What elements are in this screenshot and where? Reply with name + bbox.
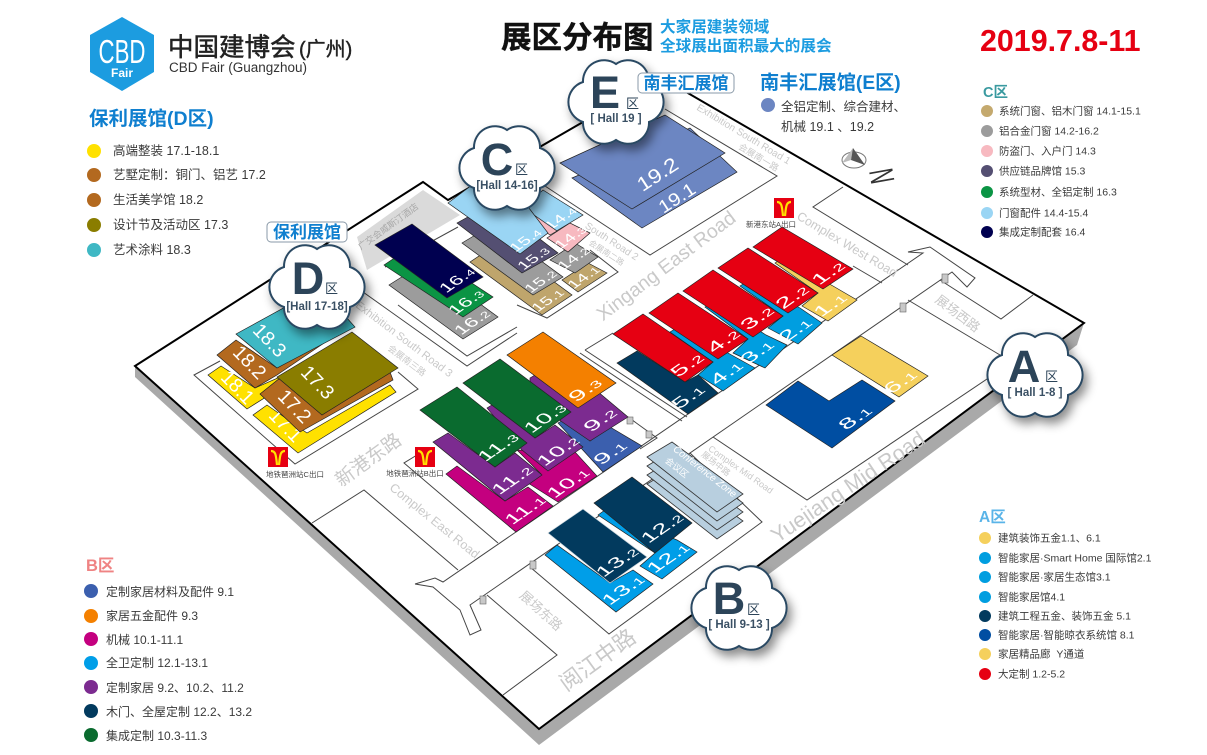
- legend: zone D: 高端整装 17.1-18.1: [113, 143, 219, 158]
- road: Yuejiang Zhong Lu: 阅江中路: [555, 624, 641, 696]
- zone cloud B: 区: [747, 602, 760, 617]
- road: mid venue road: 展场中路: [699, 449, 733, 478]
- hall 8.1: [766, 380, 895, 448]
- hall 18.1: 18.1: [216, 366, 258, 409]
- icon: metro exit C: [266, 447, 324, 479]
- legend: zone C: [981, 85, 1141, 238]
- legend heading A: A区: [979, 509, 1006, 526]
- road: South Road 3 Chinese: 会展南三路: [386, 342, 428, 378]
- hall 17.3: [277, 332, 398, 415]
- legend: zone B: 定制家居材料及配件 9.1: [106, 584, 234, 599]
- hall 15.3: 15.3: [514, 245, 554, 272]
- hall 2.1: [740, 281, 822, 345]
- hall 14.3: 14.3: [551, 224, 591, 251]
- legend: zone A: 智能家居·智能晾衣系统馆 8.1: [998, 628, 1135, 642]
- legend: zone B: [84, 557, 252, 743]
- hall 18.2: 18.2: [228, 341, 270, 384]
- hall 3.1: [705, 302, 787, 368]
- zone cloud A: A: [1008, 341, 1040, 392]
- hall 6.1: 6.1: [878, 367, 922, 397]
- zone cloud A: [ Hall 1-8 ]: [1008, 387, 1063, 399]
- hall 11.2: 11.2: [487, 463, 537, 498]
- hall 16.2: [389, 263, 498, 339]
- hall 15.4: [448, 170, 548, 254]
- legend: zone A: 智能家居·家居生态馆3.1: [998, 570, 1111, 584]
- zone cloud C: [459, 126, 555, 210]
- icon: metro exit A: [746, 198, 796, 229]
- hall 12.1: 12.1: [642, 540, 694, 576]
- hall 1.1: [775, 258, 857, 321]
- hall 3.2: 3.2: [735, 303, 779, 333]
- hall 3.1: 3.1: [735, 337, 779, 367]
- venue tag: Poly: 保利展馆: [273, 222, 341, 242]
- conference zone: [647, 442, 743, 539]
- zone cloud C: 区: [515, 162, 528, 177]
- icon: metro exit B: 地铁琶洲站B出口: [386, 468, 444, 478]
- small stair markers: [480, 274, 948, 604]
- legend: zone D: 生活美学馆 18.2: [113, 192, 203, 207]
- hall 15.2: [462, 225, 563, 295]
- hall 11.1: [446, 466, 553, 532]
- date: 2019.7.8-11: [980, 24, 1141, 58]
- hall 9.3: [507, 332, 616, 408]
- hall 11.2: [433, 433, 542, 501]
- legend: zone C: 集成定制配套 16.4: [999, 226, 1086, 238]
- legend: zone C: 供应链品牌馆 15.3: [999, 164, 1086, 178]
- subtitle: 大家居建装领域: [660, 17, 770, 36]
- icon: CBD hexagon: Fair: [111, 66, 133, 80]
- hall 10.3: [463, 359, 571, 438]
- road: Yuejiang Mid Road: Yuejiang Mid Road: [767, 427, 930, 548]
- legend heading D: 保利展馆(D区): [89, 107, 214, 130]
- hall 2.2: 2.2: [770, 282, 814, 312]
- logo wordmark: 中国建博会: [168, 34, 296, 62]
- hall 5.1: [617, 351, 718, 414]
- hall 15.1: 15.1: [528, 287, 568, 314]
- legend: zone A: 智能家居·Smart Home 国际馆2.1: [998, 552, 1152, 564]
- legend: zone A: 大定制 1.2-5.2: [998, 668, 1065, 680]
- legend: zone B: 定制家居 9.2、10.2、11.2: [106, 680, 244, 695]
- conference zone: 会议区: [663, 455, 691, 480]
- hall 16.3: [384, 245, 493, 317]
- hall 13.1: [545, 545, 653, 612]
- hall 19.2: [560, 115, 725, 209]
- legend: zone A: 建筑装饰五金1.1、6.1: [998, 532, 1101, 544]
- legend: zone D: [87, 107, 266, 257]
- icon: metro exit A: 新港东站A出口: [746, 219, 796, 229]
- hall group C: [375, 170, 607, 339]
- hotel label: 广交会威斯汀酒店: [356, 201, 420, 252]
- zone cloud E: [ Hall 19 ]: [590, 113, 642, 125]
- road: Xingang Dong Lu: 新港东路: [331, 429, 406, 491]
- hall 19.1: 19.1: [655, 179, 700, 218]
- hall 11.1: 11.1: [500, 493, 550, 528]
- hall 2.2: [718, 248, 818, 313]
- hall 1.1: 1.1: [808, 290, 852, 320]
- hall 10.1: [517, 450, 597, 502]
- road: east venue road: 展场东路: [517, 588, 565, 634]
- hall 15.2: 15.2: [521, 268, 561, 295]
- hall 5.2: [613, 314, 713, 382]
- zone cloud E: E: [590, 67, 620, 118]
- hall 14.4: [518, 190, 583, 233]
- hall 16.3: 16.3: [443, 286, 488, 317]
- hall group D: [208, 288, 398, 453]
- hall 1.2: [753, 227, 853, 289]
- legend: zone C: 系统门窗、铝木门窗 14.1-15.1: [999, 104, 1141, 118]
- hall 15.4: 15.4: [506, 227, 546, 254]
- hall 11.3: [420, 387, 527, 467]
- hall 3.2: [683, 270, 783, 337]
- hall 10.2: [487, 403, 584, 471]
- legend: zone A: 家居精品廊 Y通道: [998, 648, 1085, 660]
- hall group E: [560, 115, 737, 228]
- hall 13.2: [548, 509, 647, 583]
- hall 14.1: 14.1: [564, 264, 604, 291]
- icon: metro exit C: 地铁琶洲站C出口: [266, 469, 324, 479]
- hall 9.3: 9.3: [563, 375, 607, 405]
- zone cloud D: [Hall 17-18]: [286, 301, 348, 313]
- logo city: (广州): [299, 38, 352, 61]
- hall 19.2: 19.2: [632, 152, 683, 196]
- hall 13.1: 13.1: [597, 572, 649, 608]
- legend: zone A: [979, 509, 1152, 680]
- legend: zone B: 全卫定制 12.1-13.1: [106, 655, 208, 670]
- pink strip: [518, 208, 557, 235]
- hall 17.1: 17.1: [264, 404, 306, 447]
- legend: zone C: 防盗门、入户门 14.3: [999, 144, 1096, 158]
- hall 18.1: [208, 366, 285, 409]
- legend: zone E: 机械 19.1 、19.2: [781, 119, 874, 134]
- zone cloud E: [568, 60, 664, 144]
- hall 15.1: [470, 242, 572, 315]
- hall 15.3: [457, 203, 558, 273]
- zone cloud B: [691, 566, 787, 650]
- hall 19.1: [572, 128, 737, 228]
- hall 5.1: 5.1: [666, 382, 710, 412]
- legend: zone C: 铝合金门窗 14.2-16.2: [999, 124, 1099, 138]
- hall 14.4: 14.4: [541, 205, 581, 232]
- zone cloud C: [Hall 14-16]: [476, 180, 538, 192]
- legend: zone C: 系统型材、全铝定制 16.3: [999, 186, 1117, 198]
- zone cloud B: [ Hall 9-13 ]: [708, 619, 770, 631]
- road: Xingang East Road: Xingang East Road: [593, 207, 740, 326]
- hall 17.2: [260, 372, 393, 432]
- zone cloud A: [987, 333, 1083, 417]
- logo english: CBD Fair (Guangzhou): [169, 60, 307, 75]
- icon: compass: [842, 148, 902, 186]
- hall 12.2: [594, 477, 692, 553]
- hall 18.2: [217, 337, 333, 388]
- hall 9.1: [558, 415, 642, 472]
- hall 16.4: [375, 224, 483, 298]
- hall 18.3: [236, 288, 355, 368]
- road: Complex Mid Road: Complex Mid Road: [707, 443, 775, 496]
- hall 17.3: 17.3: [296, 361, 338, 404]
- legend: zone A: 智能家居馆4.1: [998, 590, 1065, 604]
- hall 17.2: 17.2: [273, 385, 315, 428]
- road: Exhibition South Road 3: Exhibition South Road 3: [353, 299, 455, 380]
- venue tag: Nanfenghui: 南丰汇展馆: [644, 73, 728, 93]
- map base: venue site plan: [135, 78, 1084, 745]
- road labels: [331, 103, 983, 696]
- conference zone: Conference Zone: [671, 444, 739, 500]
- legend: zone B: 机械 10.1-11.1: [106, 632, 183, 647]
- hall 13.2: 13.2: [591, 544, 643, 580]
- zone cloud D: [269, 245, 365, 329]
- subtitle: [660, 17, 832, 55]
- hall 4.2: [649, 293, 748, 359]
- hall 4.2: 4.2: [701, 326, 745, 356]
- icon: CBD hexagon: CBD: [98, 33, 146, 70]
- legend heading E: 南丰汇展馆(E区): [760, 71, 901, 94]
- hall 4.1: 4.1: [704, 358, 748, 388]
- road: South Road 2: South Road 2: [583, 221, 640, 263]
- legend: zone C: 门窗配件 14.4-15.4: [999, 206, 1088, 220]
- hall 9.2: [530, 360, 628, 441]
- hall 1.2: 1.2: [806, 258, 850, 288]
- hall group A: [613, 227, 928, 448]
- legend: zone D: 设计节及活动区 17.3: [113, 217, 228, 232]
- legend: zone D: 艺墅定制：铜门、铝艺 17.2: [113, 167, 266, 182]
- hall 6.1: [832, 336, 928, 397]
- hall 12.1: [598, 510, 697, 579]
- legend: zone E: [760, 71, 906, 134]
- subtitle: 全球展出面积最大的展会: [660, 36, 832, 55]
- road: Exhibition South Road 1: Exhibition South Road 1: [694, 103, 792, 167]
- zone cloud D: D: [292, 253, 324, 304]
- road: South Road 1 Chinese: 会展南一路: [737, 141, 781, 173]
- icon: compass: N: [862, 166, 902, 186]
- hall 14.2: 14.2: [554, 245, 594, 272]
- zone cloud D: 区: [325, 281, 338, 296]
- legend heading C: C区: [983, 85, 1008, 101]
- zone cloud E: 区: [626, 96, 639, 111]
- hall 9.1: 9.1: [588, 438, 632, 468]
- zone cloud A: 区: [1045, 369, 1058, 384]
- road: South Road 2 Chinese: 会展南二路: [587, 237, 626, 268]
- logo: [90, 17, 352, 91]
- zone cloud C: C: [481, 134, 513, 185]
- hall 18.3: 18.3: [248, 319, 290, 362]
- legend: zone B: 木门、全屋定制 12.2、13.2: [106, 704, 252, 719]
- hall 10.2: 10.2: [532, 433, 584, 469]
- hall 11.3: 11.3: [473, 430, 523, 465]
- legend: zone A: 建筑工程五金、装饰五金 5.1: [998, 610, 1131, 622]
- legend: zone D: 艺术涂料 18.3: [113, 242, 191, 257]
- icon: CBD hexagon: [90, 17, 154, 91]
- legend: zone E: 全铝定制、综合建材、: [781, 99, 906, 114]
- hall 10.1: 10.1: [542, 465, 594, 501]
- hall 4.1: [670, 326, 755, 391]
- hall 8.1: 8.1: [833, 403, 877, 433]
- legend: zone B: 家居五金配件 9.3: [106, 608, 198, 623]
- hall 17.1: [253, 385, 396, 453]
- road: Complex East Road: Complex East Road: [387, 480, 482, 561]
- hall 16.2: 16.2: [449, 306, 494, 337]
- legend: zone B: 集成定制 10.3-11.3: [106, 728, 207, 743]
- legend heading B: B区: [86, 557, 114, 575]
- road: west venue road: 展场西路: [932, 292, 983, 335]
- hall 16.4: 16.4: [434, 264, 479, 295]
- hall 12.2: 12.2: [636, 510, 688, 546]
- icon: metro exit B: [386, 447, 444, 478]
- hall 5.2: 5.2: [665, 350, 709, 380]
- hall 2.1: 2.1: [773, 315, 817, 345]
- hall group B: [420, 332, 697, 612]
- hall 9.2: 9.2: [578, 405, 622, 435]
- road: Complex West Road: Complex West Road: [794, 209, 900, 280]
- zone cloud B: B: [713, 573, 745, 624]
- title: 展区分布图: [501, 21, 654, 55]
- hall 10.3: 10.3: [519, 400, 571, 436]
